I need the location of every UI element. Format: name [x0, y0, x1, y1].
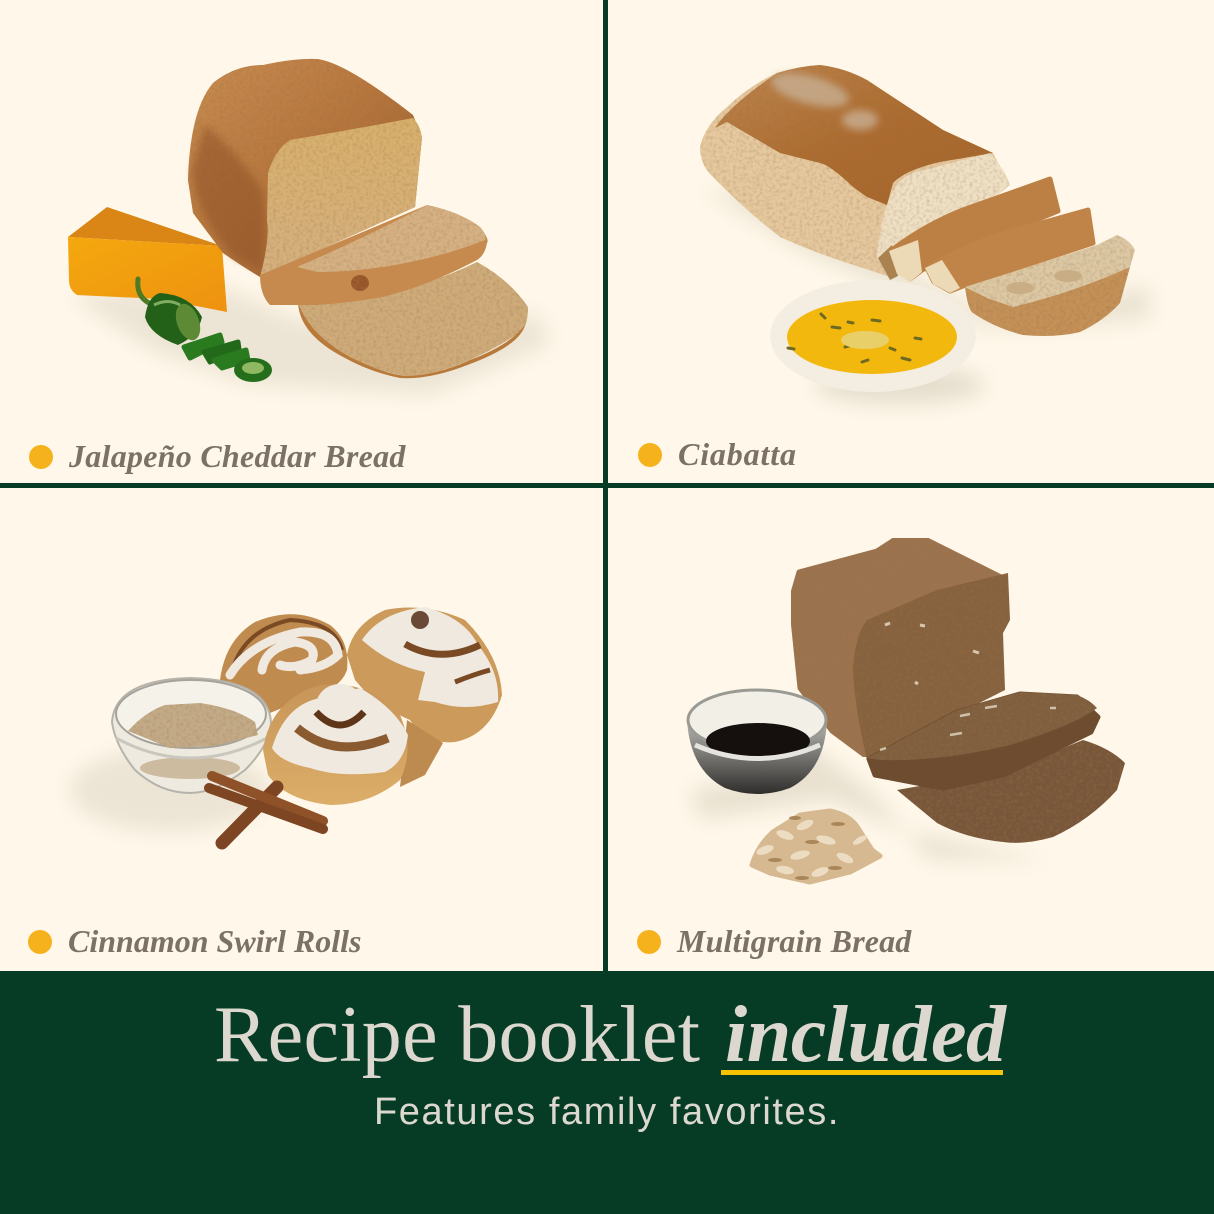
- icon: roll back right: [347, 607, 502, 742]
- underline accent: [721, 1070, 1003, 1075]
- divider: [603, 0, 608, 971]
- dish: jalapeno cheddar bread: [68, 59, 550, 395]
- icon: roll back left: [220, 614, 347, 713]
- dish: multigrain bread: [687, 538, 1125, 882]
- food illustrations: [68, 58, 1154, 884]
- caption: jalapeno cheddar bread: Jalapeño Cheddar Bread: [69, 438, 406, 474]
- icon: loaf: [188, 59, 422, 277]
- icon: molasses bowl: [687, 690, 827, 794]
- icon: multigrain loaf: [791, 538, 1010, 760]
- subheading: Features family favorites.: [374, 1091, 840, 1133]
- icon: bread slices: [260, 205, 528, 378]
- heading: included: [725, 991, 1005, 1079]
- icon: multigrain slices: [867, 692, 1125, 843]
- dish: cinnamon swirl rolls: [70, 607, 502, 843]
- icon: ciabatta loaf: [700, 65, 1010, 280]
- panel: recipe booklet banner: [0, 971, 1214, 1214]
- icon: cinnamon sticks: [209, 776, 323, 843]
- icon: ciabatta slices: [889, 179, 1135, 336]
- icon: jalapeno: [138, 279, 272, 382]
- heading: Recipe booklet: [214, 991, 700, 1079]
- icon: roll flap: [400, 720, 443, 787]
- icon: olive oil dish: [770, 280, 985, 405]
- caption: cinnamon swirl rolls: Cinnamon Swirl Rolls: [68, 923, 361, 959]
- icon: brown sugar bowl: [112, 678, 271, 793]
- icon: cheddar wedge: [68, 207, 227, 312]
- caption: multigrain bread: Multigrain Bread: [677, 923, 911, 959]
- dish: ciabatta: [700, 65, 1150, 405]
- heading: [214, 991, 1007, 1079]
- icon: oats pile: [752, 811, 880, 882]
- icon: roll front: [263, 684, 408, 805]
- caption: ciabatta: Ciabatta: [678, 436, 797, 472]
